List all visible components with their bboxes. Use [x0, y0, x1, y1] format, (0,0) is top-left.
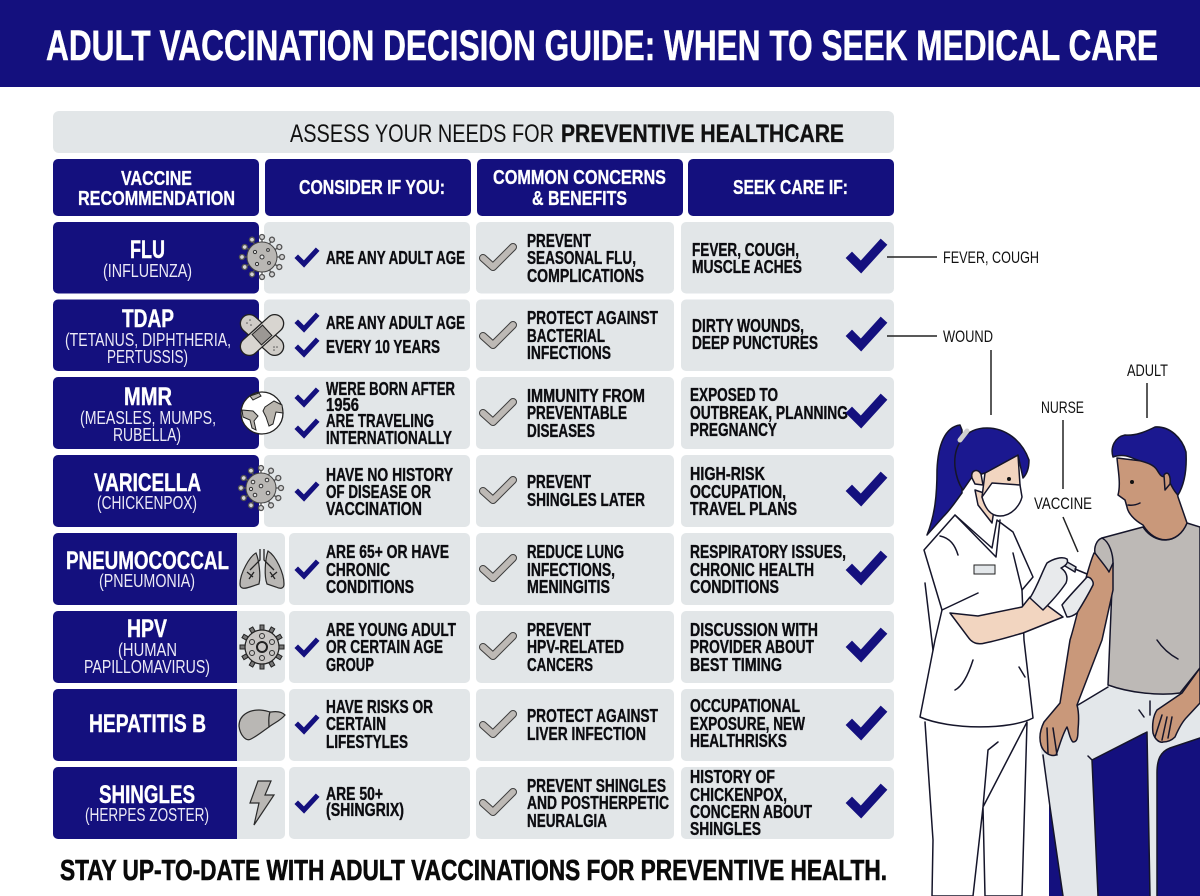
benefits text: BACTERIAL	[527, 326, 605, 346]
row: flu: (INFLUENZA)	[103, 261, 192, 281]
label: adult	[1127, 361, 1168, 418]
smile	[1128, 503, 1140, 505]
hair	[1112, 427, 1186, 495]
label: wound	[887, 327, 993, 415]
benefits text: IMMUNITY FROM	[527, 386, 645, 406]
icon: flu virus	[240, 234, 284, 280]
seek care text: HEALTHRISKS	[690, 731, 787, 751]
benefits text	[483, 308, 658, 363]
benefits text	[483, 620, 624, 675]
benefits text	[483, 706, 658, 744]
glove holding syringe	[1030, 558, 1068, 610]
icon: globe	[241, 392, 283, 434]
consider text: OR CERTAIN AGE	[326, 637, 443, 657]
subtitle band: ASSESS YOUR NEEDS FOR	[290, 120, 554, 148]
seek care text: SHINGLES	[690, 819, 761, 839]
benefits text	[483, 386, 645, 441]
icon: bandage	[237, 311, 287, 359]
benefits text	[483, 776, 669, 831]
row: shingles: (HERPES ZOSTER)	[85, 805, 209, 825]
table header row	[53, 159, 894, 216]
consider text	[298, 542, 449, 597]
row: hpv: (HUMAN	[118, 640, 177, 660]
table header row: SEEK CARE IF:	[733, 177, 848, 199]
row: varicella: (CHICKENPOX)	[97, 493, 197, 513]
seek care text: MUSCLE ACHES	[692, 257, 802, 277]
sleeve	[1095, 538, 1113, 572]
row: tdap: (TETANUS, DIPHTHERIA,	[65, 330, 231, 350]
label: fever, cough: FEVER, COUGH	[943, 248, 1039, 267]
consider text	[298, 465, 453, 519]
icon: lightning bolt	[250, 781, 274, 825]
row: pneumococcal: (PNEUMONIA)	[99, 571, 195, 591]
table header row: VACCINE	[121, 168, 192, 190]
hair	[955, 428, 1029, 490]
benefits text: PROTECT AGAINST	[527, 308, 658, 328]
benefits text: SEASONAL FLU,	[527, 248, 636, 268]
seek care text	[690, 767, 881, 839]
benefits text: PREVENTABLE	[527, 403, 627, 423]
neck	[975, 490, 994, 523]
table header row: & BENEFITS	[532, 188, 627, 210]
label: vaccine: VACCINE	[1034, 494, 1092, 513]
row: mmr	[53, 377, 894, 449]
face	[982, 455, 1020, 497]
seek care text	[690, 542, 881, 597]
trouser outlines	[1043, 687, 1200, 896]
consider text	[298, 313, 465, 357]
seek care text	[692, 316, 881, 353]
consider text: WERE BORN AFTER	[326, 379, 455, 399]
consider text: 1956	[326, 395, 359, 415]
benefits text: SHINGLES LATER	[527, 490, 645, 510]
label: nurse	[1041, 398, 1084, 489]
second glove	[1062, 577, 1093, 617]
benefits text: PREVENT SHINGLES	[527, 776, 666, 796]
consider text: ARE ANY ADULT AGE	[326, 313, 465, 333]
ear	[1164, 473, 1170, 490]
trousers	[925, 722, 1027, 896]
benefits text: PREVENT	[527, 472, 591, 492]
illustration: nurse	[920, 425, 1093, 896]
chair	[1049, 732, 1200, 896]
benefits text	[483, 472, 645, 510]
row: pneumococcal	[53, 533, 894, 605]
row: mmr: MMR	[124, 383, 172, 411]
benefits text: PREVENT	[527, 620, 591, 640]
row: flu	[53, 222, 894, 294]
consider text: ARE YOUNG ADULT	[326, 620, 456, 640]
consider text: ARE ANY ADULT AGE	[326, 248, 465, 268]
title banner	[0, 0, 1200, 87]
consider text: INTERNATIONALLY	[326, 428, 452, 448]
seek care text: CONDITIONS	[690, 577, 779, 597]
consider text: VACCINATION	[326, 499, 422, 519]
forearm	[950, 597, 1063, 644]
consider text: ARE 65+ OR HAVE	[326, 542, 449, 562]
consider text	[298, 620, 456, 675]
consider text: EVERY 10 YEARS	[326, 337, 440, 357]
consider text	[298, 784, 404, 820]
seek care text	[690, 464, 881, 519]
row: hepatitis b: HEPATITIS B	[89, 710, 206, 738]
arm	[1040, 553, 1113, 755]
seek care text: CONCERN ABOUT	[690, 802, 812, 822]
hand	[1153, 668, 1200, 742]
row: flu: FLU	[130, 236, 165, 264]
icon: hpv virus	[240, 625, 284, 669]
seek care text: OCCUPATIONAL	[690, 696, 800, 716]
consider text: CONDITIONS	[326, 577, 414, 597]
consider text: GROUP	[326, 655, 374, 675]
mask	[982, 483, 1022, 516]
eye	[1130, 480, 1134, 484]
row: hpv: PAPILLOMAVIRUS)	[84, 657, 210, 677]
seek care text	[690, 696, 881, 751]
label: vaccine	[1034, 494, 1092, 552]
row: hpv: HPV	[127, 615, 167, 643]
consider text: ARE TRAVELING	[326, 411, 434, 431]
icon: liver	[239, 710, 285, 740]
seek care text: CHICKENPOX,	[690, 785, 787, 805]
shirt	[1095, 523, 1200, 694]
footer message: STAY UP-TO-DATE WITH ADULT VACCINATIONS FOR PREVENTIVE HEALTH.	[60, 855, 887, 887]
benefits text: NEURALGIA	[527, 811, 607, 831]
consider text: HAVE RISKS OR	[326, 697, 433, 717]
benefits text: LIVER INFECTION	[527, 724, 646, 744]
benefits text: MENINGITIS	[527, 577, 610, 597]
seek care text: BEST TIMING	[690, 655, 782, 675]
consider text: CERTAIN	[326, 714, 386, 734]
shirt fold	[1157, 640, 1178, 659]
benefits text: INFECTIONS,	[527, 560, 615, 580]
seek care text: EXPOSED TO	[690, 385, 778, 405]
seek care text: HISTORY OF	[690, 767, 775, 787]
fingers	[1155, 715, 1172, 740]
label: nurse: NURSE	[1041, 398, 1084, 417]
neck and face	[1117, 458, 1187, 540]
row: shingles	[53, 767, 894, 839]
benefits text: PROTECT AGAINST	[527, 706, 658, 726]
eye	[1007, 477, 1011, 481]
benefits text: HPV-RELATED	[527, 637, 624, 657]
benefits text: PREVENT	[527, 231, 591, 251]
seek care text: HIGH-RISK	[690, 464, 765, 484]
row: tdap: TDAP	[122, 305, 174, 333]
row: mmr: RUBELLA)	[113, 425, 181, 445]
consider text	[298, 697, 433, 752]
table header row: RECOMMENDATION	[78, 188, 235, 210]
seek care text	[690, 620, 881, 675]
row: tdap: PERTUSSIS)	[107, 347, 188, 367]
seek care text: PREGNANCY	[690, 420, 777, 440]
label: adult: ADULT	[1127, 361, 1168, 380]
seek care text: PROVIDER ABOUT	[690, 637, 814, 657]
row: varicella: VARICELLA	[94, 469, 201, 497]
seek care text: EXPOSURE, NEW	[690, 714, 805, 734]
benefits text	[483, 542, 624, 597]
illustration: adult patient	[1040, 427, 1200, 896]
consider text	[298, 248, 465, 268]
consider text: CHRONIC	[326, 560, 390, 580]
table header row: COMMON CONCERNS	[493, 167, 666, 189]
row: varicella	[53, 455, 894, 527]
seek care text: DEEP PUNCTURES	[692, 333, 818, 353]
seek care text	[690, 385, 881, 440]
consider text: LIFESTYLES	[326, 732, 408, 752]
seek care text: TRAVEL PLANS	[690, 499, 797, 519]
ponytail	[927, 425, 962, 535]
row: shingles: SHINGLES	[99, 781, 195, 809]
icon: chickenpox virus	[238, 466, 284, 510]
seek care text: DIRTY WOUNDS,	[692, 316, 804, 336]
consider text	[298, 379, 455, 448]
benefits text: AND POSTHERPETIC	[527, 793, 669, 813]
label: wound: WOUND	[943, 327, 993, 346]
consider text: HAVE NO HISTORY	[326, 465, 453, 485]
row: mmr: (MEASLES, MUMPS,	[80, 408, 216, 428]
row: hepatitis b	[53, 689, 894, 761]
seek care text: OCCUPATION,	[690, 482, 786, 502]
benefits text: DISEASES	[527, 421, 595, 441]
row: tdap	[53, 300, 894, 371]
row: hpv	[53, 611, 894, 683]
benefits text: INFECTIONS	[527, 343, 611, 363]
icon: lungs	[240, 549, 284, 588]
seek care text: FEVER, COUGH,	[692, 240, 799, 260]
seek care text: RESPIRATORY ISSUES,	[690, 542, 846, 562]
seek care text	[692, 240, 881, 277]
consider text: (SHINGRIX)	[326, 800, 404, 820]
seek care text: CHRONIC HEALTH	[690, 560, 814, 580]
benefits text: CANCERS	[527, 655, 593, 675]
benefits text: REDUCE LUNG	[527, 542, 624, 562]
fingers	[1047, 728, 1057, 755]
syringe	[1060, 559, 1076, 572]
seek care text: OUTBREAK, PLANNING	[690, 403, 848, 423]
subtitle band: PREVENTIVE HEALTHCARE	[561, 120, 844, 148]
row: pneumococcal: PNEUMOCOCCAL	[66, 547, 229, 575]
benefits text: COMPLICATIONS	[527, 266, 644, 286]
scrubs	[920, 515, 1033, 727]
ear	[972, 471, 983, 485]
trousers	[1040, 680, 1200, 896]
benefits text	[483, 231, 644, 286]
badge	[974, 565, 995, 574]
hair tie	[960, 431, 967, 440]
subtitle band	[53, 111, 894, 153]
consider text: ARE 50+	[326, 784, 383, 804]
table header row: CONSIDER IF YOU:	[299, 177, 445, 199]
consider text: OF DISEASE OR	[326, 482, 431, 502]
seek care text: DISCUSSION WITH	[690, 620, 818, 640]
